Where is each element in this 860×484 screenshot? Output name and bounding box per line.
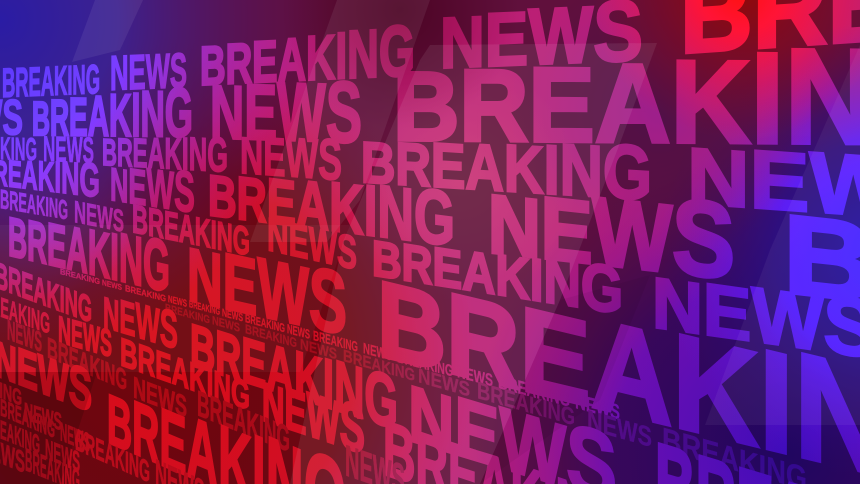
text row: large second band: NEWS [210,60,362,162]
text row: large second band [0,12,860,176]
text row: fifth band: BREAKING [372,216,623,329]
text row: tiny bright band: NEWS [222,307,243,324]
text rows: small lower left cluster [0,360,205,484]
text row: tiny bright band: NEWS [168,294,187,310]
text row: dim eighth band: NEWS [133,370,187,424]
text row: large red band: NEWS [187,220,347,354]
text row: seventh band [0,286,623,484]
text rows: small lower left cluster: NEWS [24,398,62,436]
text row: fourth band: NEWS [488,155,735,302]
text row: sixth band: BREAKING [190,299,398,446]
text row: tiny bright band: BREAKING [60,267,100,286]
text row: third band: NEWS [240,121,342,193]
text row: fifth band: BREAKING [132,195,250,265]
text row: seventh band: BREAKING [120,329,250,419]
text row: sixth band: BREAKING [0,254,92,332]
text row: tiny bright band: NEWS [287,321,310,342]
text row: fifth band: NEWS [74,194,124,239]
text row: large second band: BREAKING [32,72,193,152]
text row: large red band [8,191,860,484]
text row: tiny bright band: NEWS [575,389,620,425]
text row: fourth band: BREAKING [208,146,455,263]
text row: tiny dim band: NEWS [418,365,470,401]
text row: tiny bright band: BREAKING [189,299,220,318]
text row: third band: BREAKING [102,122,228,183]
text row: dim eighth band: NEWS [7,315,42,359]
text row: tiny bright band: BREAKING [313,328,358,356]
text row: tiny bright band: BREAKING [125,283,166,304]
text row: large red band: BREAKING [8,191,170,308]
text row: tiny dim band [165,302,807,484]
text row: fifth band [0,183,860,376]
text row: third band: BREAKING [361,113,652,217]
text row: top band rising right [2,0,860,106]
text row: tiny dim band: BREAKING [477,377,575,431]
text row: large lower left band [0,323,347,484]
text row: top band rising right: BREAKING [2,56,100,106]
text row: tiny bright band: BREAKING [397,348,453,380]
text row: dim eighth band: BREAKING [47,332,127,397]
text row: fifth band: NEWS [267,208,357,281]
text row: tiny dim band: BREAKING [343,345,415,385]
text row: tiny dim band: NEWS [212,313,240,335]
text row: seventh band: NEWS [262,360,365,469]
text row: tiny bright band: NEWS [457,361,493,390]
text row: tiny bright band [60,267,620,425]
text row: dim eighth band [7,315,405,484]
text row: fifth band: BREAKING [0,183,68,226]
text row: tiny dim band: NEWS [587,404,652,454]
text row: tiny bright band: BREAKING [498,372,570,412]
text row: tiny bright band: NEWS [102,278,122,292]
text row: tiny dim band: NEWS [300,336,337,363]
text rows: small lower left cluster: NEWS [60,417,90,458]
text row: fourth band: NEWS [110,148,195,226]
text row: tiny dim band: BREAKING [245,321,297,351]
text row: tiny bright band: BREAKING [245,311,285,335]
text row: fourth band [0,140,860,346]
text row: tiny bright band: NEWS [363,340,392,364]
text row: sixth band: NEWS [103,280,178,361]
text row: top band rising right: NEWS [110,44,187,101]
text rows: small lower left cluster: BREAKING [0,394,55,444]
text row: sixth band [0,254,860,484]
text row: third band [0,113,860,242]
text row: seventh band: NEWS [58,309,112,366]
text row: tiny dim band: BREAKING [165,302,210,327]
text row: top band rising right: BREAKING [200,11,415,101]
text row: third band: NEWS [43,128,94,171]
